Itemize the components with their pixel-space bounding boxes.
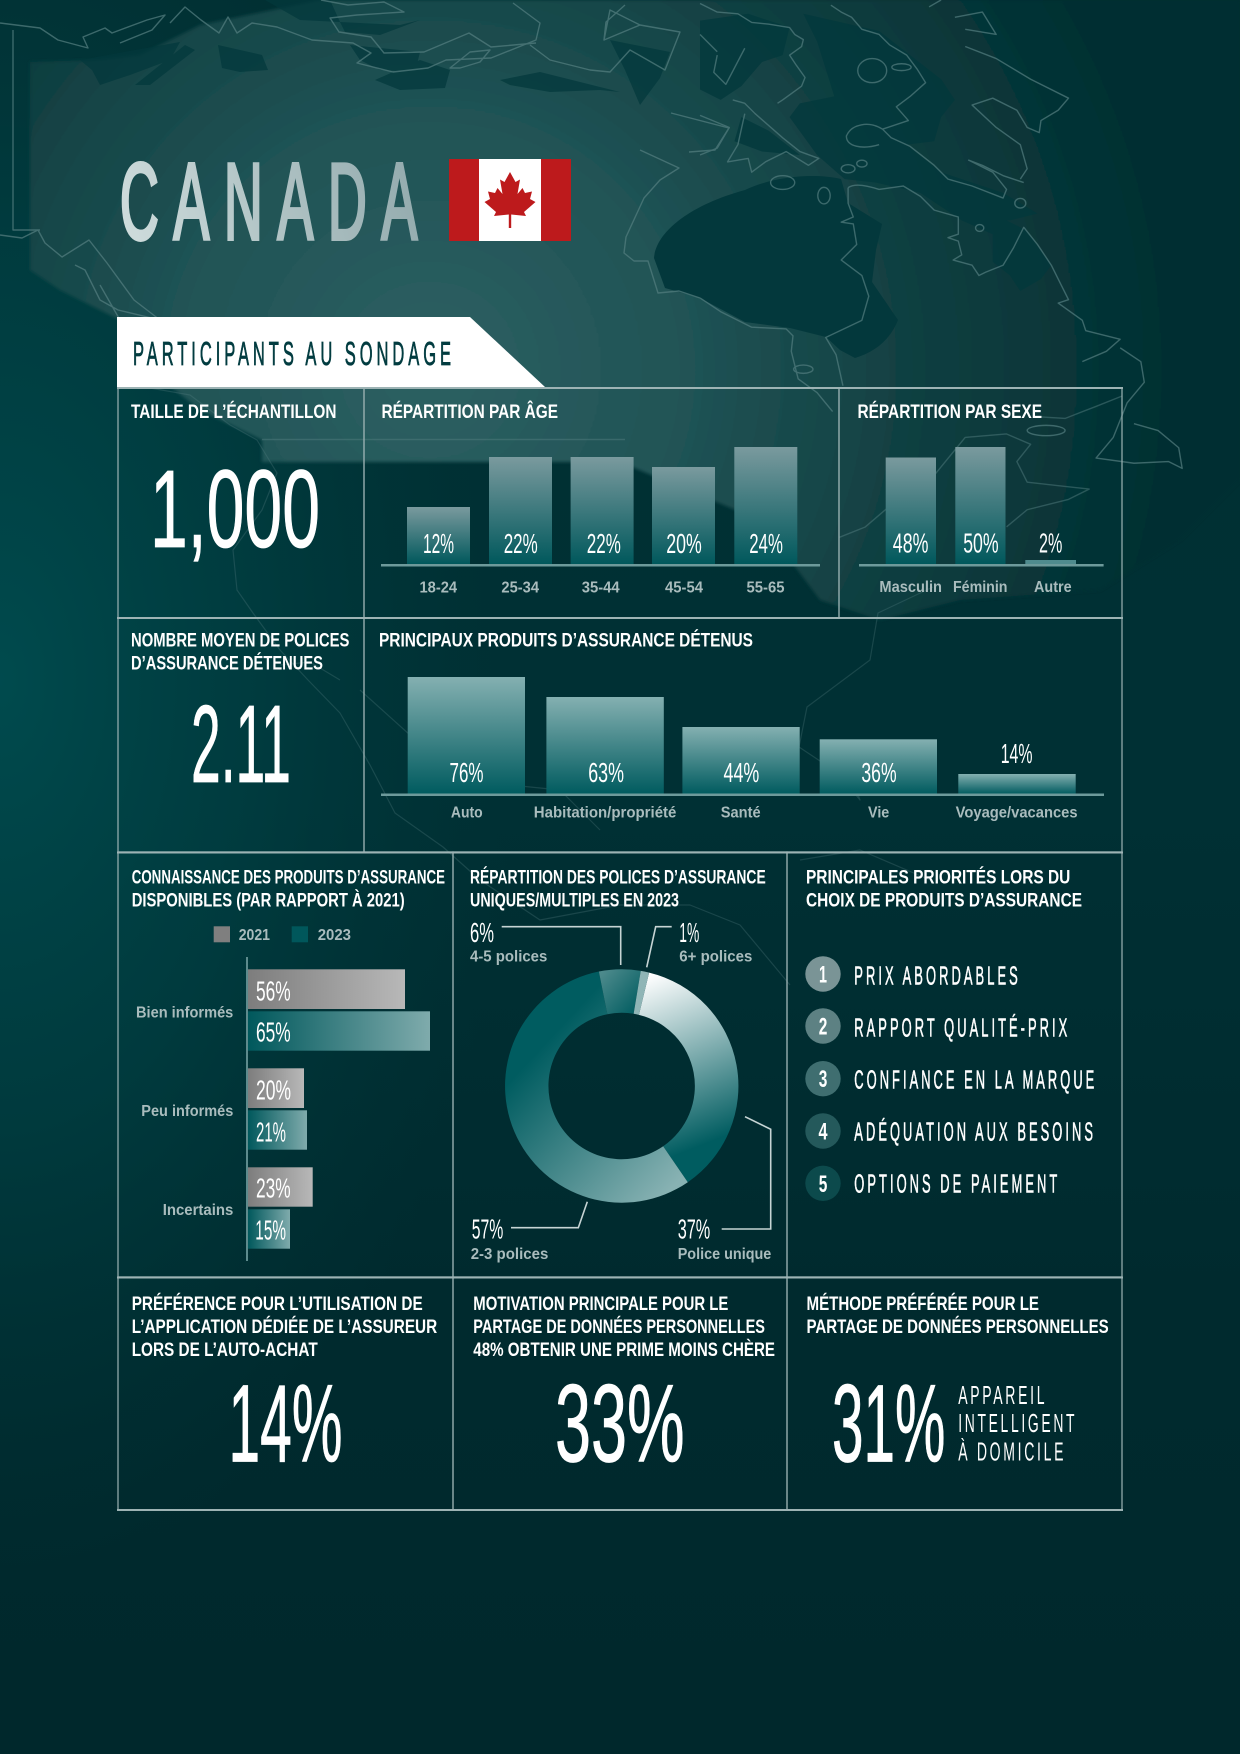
heading: PARTAGE DE DONNÉES PERSONNELLES <box>806 1315 1109 1338</box>
method label: APPAREIL <box>958 1380 1047 1410</box>
bar chart: gender: Féminin <box>953 579 1008 596</box>
legend: 2021 <box>239 927 270 944</box>
bar chart: age <box>381 447 820 596</box>
callout: 37%: 37% <box>678 1213 710 1244</box>
big number: 1,000 <box>150 448 320 571</box>
map: lower continent coastlines <box>150 388 933 985</box>
callout: 1%: 6+ polices <box>679 949 752 966</box>
bar chart: products: Auto <box>451 804 483 821</box>
heading <box>806 865 1082 912</box>
icon: Canadian flag <box>449 159 571 241</box>
heading: L’APPLICATION DÉDIÉE DE L’ASSUREUR <box>132 1315 437 1338</box>
heading: DISPONIBLES (PAR RAPPORT À 2021) <box>132 889 405 912</box>
bar chart: age: 24% <box>749 528 783 559</box>
bar chart: age: 22% <box>504 528 538 559</box>
big percentage: 14% <box>228 1363 342 1486</box>
bar chart: products: Habitation/propriété <box>534 804 676 821</box>
bar chart: products: 76% <box>450 757 484 788</box>
heading: UNIQUES/MULTIPLES EN 2023 <box>470 890 679 912</box>
priority 3: 3 <box>819 1066 827 1093</box>
priority 1: 1 <box>819 962 827 988</box>
map: northern coastlines <box>0 0 1182 537</box>
heading: TAILLE DE L’ÉCHANTILLON <box>131 400 336 423</box>
bar chart: products: Vie <box>868 804 889 821</box>
legend <box>214 926 351 944</box>
bar chart: awareness: 65% <box>256 1017 291 1048</box>
priority 4 <box>805 1113 1096 1149</box>
bar chart: age: 22% <box>587 528 621 559</box>
bar chart: products: 14% <box>1001 738 1032 769</box>
bar chart: age: 18-24 <box>420 580 457 596</box>
heading: PRINCIPALES PRIORITÉS LORS DU <box>806 865 1070 888</box>
big percentage: 33% <box>555 1363 685 1486</box>
bar chart: age: 45-54 <box>665 580 703 596</box>
heading: MÉTHODE PRÉFÉRÉE POUR LE <box>806 1292 1039 1315</box>
bar chart: awareness: Incertains <box>163 1202 233 1219</box>
priority 5: 5 <box>819 1171 827 1198</box>
bar chart: products: Santé <box>721 804 761 821</box>
priority 5 <box>805 1166 1060 1201</box>
bar chart: gender: Masculin <box>879 579 942 596</box>
bar chart: awareness: 23% <box>256 1173 291 1204</box>
panel: insurer app preference <box>118 1277 453 1510</box>
heading: D’ASSURANCE DÉTENUES <box>131 652 323 674</box>
heading: 48% OBTENIR UNE PRIME MOINS CHÈRE <box>473 1338 775 1361</box>
heading <box>132 866 445 912</box>
map: Hudson Bay and dark waters <box>80 0 1051 358</box>
bar chart: awareness: 20% <box>256 1075 291 1106</box>
panel: top priorities <box>787 852 1122 1277</box>
heading <box>470 865 766 912</box>
big percentage: 31% <box>832 1363 945 1486</box>
section banner: PARTICIPANTS AU SONDAGE <box>133 336 455 373</box>
bar chart: age: 55-65 <box>746 580 785 596</box>
legend: 2023 <box>318 927 351 944</box>
panel: data sharing motivation <box>453 1277 787 1510</box>
callout: 6% <box>470 917 621 966</box>
bar chart: awareness: 15% <box>255 1214 286 1245</box>
method label: INTELLIGENT <box>958 1408 1077 1438</box>
donut chart <box>505 969 738 1203</box>
heading: CHOIX DE PRODUITS D’ASSURANCE <box>806 890 1082 912</box>
bar chart: age: 35-44 <box>582 580 620 596</box>
callout: 6%: 4-5 polices <box>470 949 547 966</box>
callout: 57% <box>471 1202 587 1263</box>
priority 1: PRIX ABORDABLES <box>854 962 1021 990</box>
bar chart: products: 63% <box>588 757 624 788</box>
panel: age distribution <box>364 388 839 618</box>
callout: 57%: 57% <box>472 1213 503 1244</box>
bar chart: gender <box>859 447 1104 596</box>
text: CANADA <box>120 141 432 263</box>
panel: sample size <box>118 388 364 618</box>
map: Canada landmass <box>30 0 1240 620</box>
heading <box>806 1292 1109 1338</box>
bar chart: gender: 50% <box>963 528 999 558</box>
priority 1 <box>805 956 1021 992</box>
panel: gender distribution <box>839 388 1122 618</box>
priority 3 <box>805 1061 1097 1096</box>
heading <box>131 630 349 674</box>
bar chart: products: 36% <box>861 757 897 788</box>
priority 4: 4 <box>818 1118 828 1146</box>
heading <box>132 1292 437 1361</box>
heading: PRINCIPAUX PRODUITS D’ASSURANCE DÉTENUS <box>379 628 753 652</box>
bar chart: awareness: Bien informés <box>136 1005 233 1022</box>
panel: product awareness <box>118 852 453 1277</box>
heading: NOMBRE MOYEN DE POLICES <box>131 630 349 652</box>
bar chart: awareness <box>136 957 430 1261</box>
heading: LORS DE L’AUTO-ACHAT <box>132 1339 318 1361</box>
heading: MOTIVATION PRINCIPALE POUR LE <box>473 1293 728 1315</box>
method label <box>958 1380 1077 1467</box>
bar chart: gender: 48% <box>893 528 928 558</box>
heading: RÉPARTITION PAR SEXE <box>858 400 1042 423</box>
heading: RÉPARTITION PAR ÂGE <box>382 399 558 423</box>
panel: average policies <box>118 618 364 852</box>
bar chart: products: 44% <box>724 757 759 788</box>
heading: PARTAGE DE DONNÉES PERSONNELLES <box>473 1315 765 1338</box>
bar chart: awareness: 21% <box>256 1117 286 1148</box>
bar chart: awareness: Peu informés <box>141 1103 233 1120</box>
callout: 6%: 6% <box>470 917 494 948</box>
priority 2: 2 <box>819 1014 827 1040</box>
priority 2 <box>805 1008 1070 1044</box>
method label: À DOMICILE <box>958 1437 1066 1467</box>
heading: RÉPARTITION DES POLICES D’ASSURANCE <box>470 865 766 888</box>
panel: main insurance products <box>364 618 1122 852</box>
bar chart: gender: 2% <box>1039 528 1062 558</box>
heading: CONNAISSANCE DES PRODUITS D’ASSURANCE <box>132 866 445 888</box>
callout: 57%: 2-3 polices <box>471 1246 548 1263</box>
bar chart: age: 12% <box>423 528 454 559</box>
bar chart: age: 25-34 <box>501 580 539 596</box>
section banner <box>117 317 545 387</box>
bar chart: awareness: 56% <box>256 976 291 1007</box>
heading <box>473 1293 775 1361</box>
heading: PRÉFÉRENCE POUR L’UTILISATION DE <box>132 1292 423 1315</box>
panel: average policies: 2.11 <box>191 683 291 806</box>
bar chart: gender: Autre <box>1034 579 1072 596</box>
callout: 37%: Police unique <box>678 1246 771 1263</box>
bar chart: products <box>381 677 1104 821</box>
panel: single and multiple policies <box>453 852 787 1277</box>
callout: 37% <box>678 1117 771 1263</box>
callout: 1% <box>647 917 752 967</box>
bar chart: products: Voyage/vacances <box>956 804 1078 821</box>
panel: preferred sharing method <box>787 1277 1122 1510</box>
callout: 1%: 1% <box>679 917 699 948</box>
bar chart: age: 20% <box>666 528 702 559</box>
